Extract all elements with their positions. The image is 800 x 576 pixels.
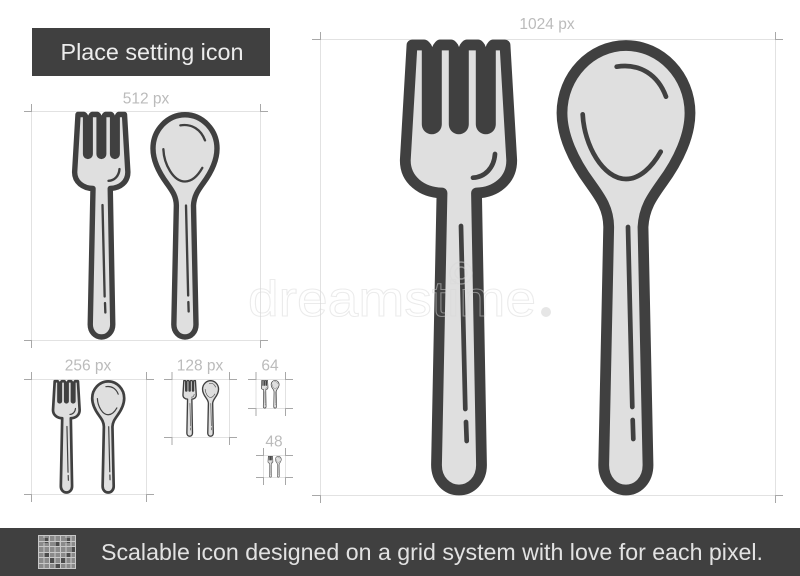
size frame: 256 px	[24, 358, 154, 502]
footer bar	[0, 528, 800, 576]
size frame: 256 px: 256 px	[65, 358, 112, 374]
size frame: 48 px: 48	[265, 434, 283, 450]
icon: fork and spoon, 128 px	[183, 380, 219, 436]
title banner	[32, 28, 270, 76]
size frame: 128 px	[164, 358, 237, 445]
size frame: 64 px: 64	[261, 358, 279, 374]
size frame: 1024 px: 1024 px	[519, 16, 575, 33]
size frame: 512 px	[24, 90, 268, 348]
size frame: 512 px: 512 px	[123, 90, 170, 108]
icon: fork and spoon, 48 px	[268, 456, 281, 477]
icon: pixel grid	[38, 535, 76, 569]
title banner: Place setting icon	[60, 39, 244, 65]
footer caption: Scalable icon designed on a grid system with love for each pixel.	[101, 539, 763, 565]
icon: fork and spoon, 256 px	[53, 380, 124, 492]
size frame: 128 px: 128 px	[177, 358, 224, 374]
size frame: 64 px	[248, 358, 293, 416]
icon: fork and spoon, 512 px	[75, 112, 217, 337]
watermark: dreamstime	[248, 271, 536, 327]
icon: fork and spoon, 64 px	[261, 380, 279, 408]
icon: fork and spoon, 1024 px	[405, 39, 690, 490]
size frame: 48 px	[256, 434, 293, 485]
